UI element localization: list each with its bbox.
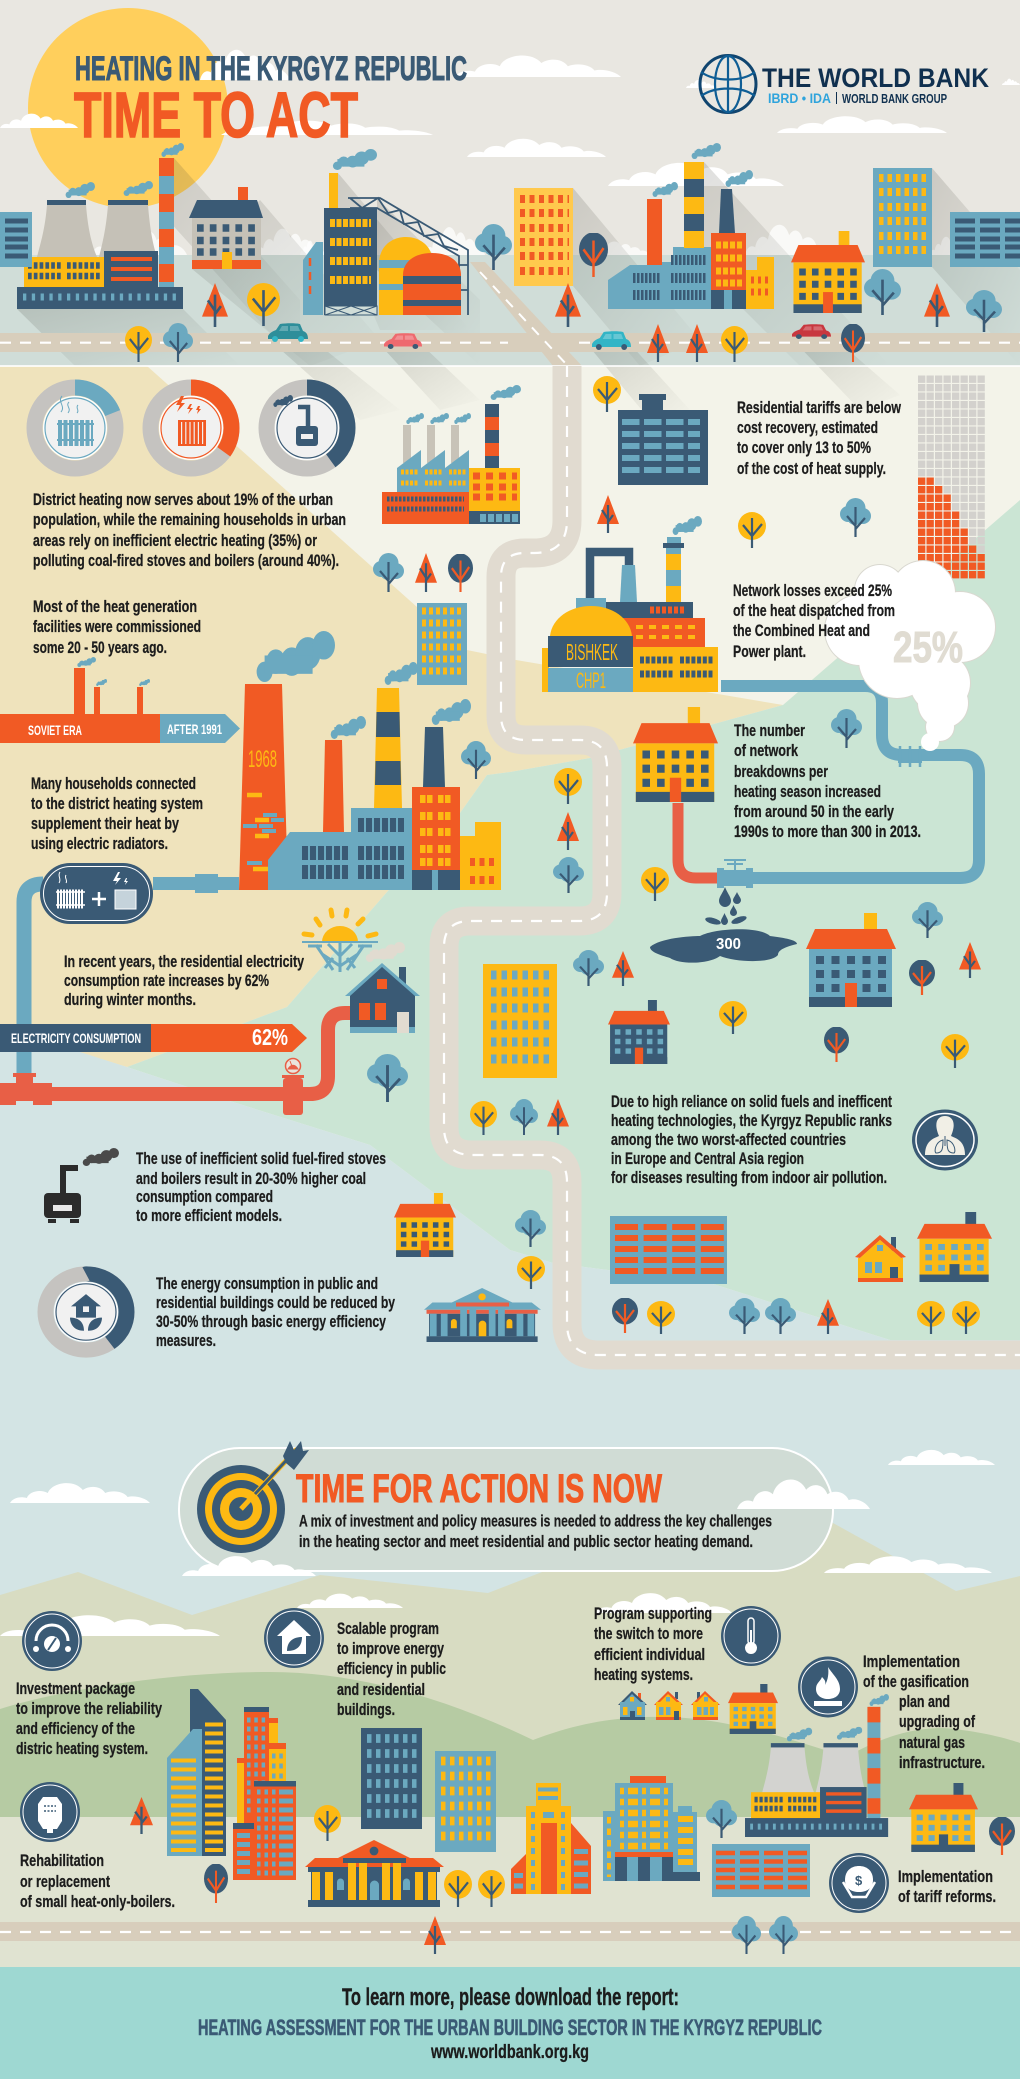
public building (temple) — [424, 1288, 541, 1342]
text: facility age: Most of the heat generation — [33, 598, 197, 616]
step: gasification: plan and — [899, 1693, 950, 1711]
icon: target with arrow — [197, 1441, 309, 1553]
text: residential tariffs: of the cost of heat supply. — [737, 460, 886, 478]
text: network breakdowns: from around 50 in the early — [734, 803, 895, 821]
step: rehabilitation of boilers — [20, 1782, 175, 1911]
step: tariff reforms: Implementation — [898, 1868, 993, 1886]
text: winter electricity: during winter months. — [64, 991, 196, 1009]
text: indoor air pollution: in Europe and Central Asia region — [611, 1150, 804, 1168]
text: district heating share — [33, 491, 346, 570]
text: network breakdowns: breakdowns per — [734, 763, 828, 781]
trees: mid right — [553, 709, 981, 995]
step: efficient individual heating: efficient individual — [594, 1646, 705, 1664]
valve and leak puddle 300: 300 — [716, 936, 741, 953]
step: scalable program: buildings. — [337, 1701, 395, 1719]
text: district heating share: areas rely on inefficient electric heating (35%) or — [33, 532, 317, 550]
banner: time for action is now: A mix of investment and policy measures is needed to address the key challenges — [299, 1512, 772, 1530]
step: rehabilitation of boilers: or replacement — [20, 1873, 110, 1891]
step: rehabilitation of boilers: Rehabilitation — [20, 1852, 104, 1870]
step: scalable program: to improve energy — [337, 1640, 445, 1658]
step: efficient individual heating — [594, 1605, 781, 1684]
text: network breakdowns: The number — [734, 722, 805, 740]
footer panel: To learn more, please download the report: — [342, 1984, 679, 2011]
blue house — [806, 913, 896, 1007]
text: district heating share: population, while the remaining households in urban — [33, 511, 346, 529]
factory with stripes chimney — [382, 385, 521, 524]
text: solid fuel stoves: consumption compared — [136, 1188, 273, 1206]
logo: The World Bank — [700, 56, 989, 112]
text: indoor air pollution — [611, 1093, 892, 1187]
yellow and orange tower — [511, 1783, 591, 1894]
navy house — [608, 1000, 670, 1064]
text: residential tariffs: Residential tariffs are below — [737, 399, 901, 417]
factory complex (right) — [608, 143, 774, 309]
footer panel — [0, 1967, 1020, 2079]
step: investment package: Investment package — [16, 1680, 135, 1698]
text: energy efficiency: 30-50% through basic energy efficiency — [156, 1313, 387, 1331]
text: electric radiators: supplement their heat by — [31, 815, 180, 833]
step: gasification: upgrading of — [899, 1713, 975, 1731]
text: network losses: of the heat dispatched from — [733, 602, 895, 620]
blue tall building — [873, 168, 932, 267]
text: indoor air pollution: for diseases resulting from indoor air pollution. — [611, 1169, 887, 1187]
text: energy efficiency — [156, 1275, 396, 1350]
text: energy efficiency: measures. — [156, 1332, 216, 1350]
text: winter electricity — [64, 953, 305, 1009]
step: investment package: and efficiency of the — [16, 1720, 135, 1738]
bar: electricity consumption 62%: 62% — [252, 1024, 288, 1050]
text: energy efficiency: The energy consumption in public and — [156, 1275, 378, 1293]
text: network breakdowns: 1990s to more than 300 in 2013. — [734, 823, 921, 841]
tall yellow building — [514, 188, 573, 286]
soviet era timeline bar — [0, 657, 240, 743]
factory complex with chimneys — [268, 662, 501, 890]
trees: right upper — [593, 376, 871, 548]
text: indoor air pollution: Due to high reliance on solid fuels and inefficent — [611, 1093, 892, 1111]
steam cloud with 25% — [824, 560, 996, 751]
power plant (bottom) — [745, 1694, 889, 1837]
yellow house above pipe — [633, 707, 718, 802]
banner: time for action is now: TIME FOR ACTION IS NOW — [296, 1467, 662, 1511]
text: network breakdowns: heating season increased — [734, 783, 881, 801]
steam cloud with 25%: 25% — [893, 623, 963, 672]
step: efficient individual heating: the switch to more — [594, 1625, 703, 1643]
text: winter electricity: consumption rate increases by 62% — [64, 972, 269, 990]
text: facility age: some 20 - 50 years ago. — [33, 639, 167, 657]
text: district heating share: polluting coal-fired stoves and boilers (around 40%). — [33, 552, 339, 570]
power plant (left) — [17, 143, 184, 309]
text: solid fuel stoves — [136, 1150, 386, 1225]
small yellow apartment (bottom) — [728, 1684, 778, 1734]
navy tall building — [361, 1728, 422, 1829]
trees: mid left — [373, 553, 473, 592]
step: gasification: natural gas — [899, 1734, 965, 1752]
pipe: hot water blue network — [678, 686, 979, 878]
tall yellow building with blue windows — [483, 964, 557, 1078]
footer panel: www.worldbank.org.kg — [430, 2042, 589, 2063]
Bishkek CHP1 plant: BISHKEK — [566, 639, 618, 665]
pill: radiator plus electric heater — [24, 863, 239, 1075]
step: scalable program — [264, 1608, 446, 1719]
sun — [28, 8, 228, 208]
text: residential tariffs: cost recovery, estimated — [737, 419, 878, 437]
logo: The World Bank: THE WORLD BANK — [762, 63, 989, 93]
step: investment package: distric heating system. — [16, 1740, 148, 1758]
text: electric radiators: using electric radiators. — [31, 835, 168, 853]
donut: energy efficiency 40% — [46, 1274, 126, 1350]
text: winter electricity: In recent years, the residential electricity — [64, 953, 305, 971]
logo: The World Bank: WORLD BANK GROUP — [842, 91, 947, 106]
text: network breakdowns — [734, 722, 921, 841]
cars — [268, 323, 831, 350]
logo: The World Bank: IBRD • IDA — [768, 91, 831, 106]
step: tariff reforms — [829, 1853, 996, 1913]
soviet era timeline bar: AFTER 1991 — [167, 721, 222, 737]
long diagonal shadows — [17, 158, 1020, 420]
blue building with orange bars (bottom) — [712, 1844, 810, 1897]
text: network breakdowns: of network — [734, 742, 799, 760]
soviet era timeline bar: SOVIET ERA — [28, 722, 82, 738]
text: solid fuel stoves: to more efficient models. — [136, 1207, 282, 1225]
Bishkek CHP1 plant: CHP1 — [576, 668, 606, 693]
step: investment package — [16, 1611, 163, 1758]
industrial plant with conveyor — [303, 149, 468, 315]
orange tower cluster — [233, 1707, 296, 1880]
donut: coal stoves 40% — [266, 388, 348, 468]
text: district heating share: District heating now serves about 19% of the urban — [33, 491, 333, 509]
text: network losses: Network losses exceed 25% — [733, 582, 892, 600]
navy house with smoke — [345, 942, 420, 1033]
skyscraper pair (left) — [167, 1689, 226, 1856]
text: residential tariffs: to cover only 13 to 50% — [737, 439, 871, 457]
step: scalable program: efficiency in public — [337, 1660, 446, 1678]
text: electric radiators: Many households connected — [31, 775, 196, 793]
step: gasification — [798, 1653, 985, 1772]
icon: coal stove — [44, 1148, 119, 1221]
navy office building — [618, 394, 708, 485]
text: solid fuel stoves: and boilers result in 20-30% higher coal — [136, 1170, 366, 1188]
waffle chart: cost recovery — [918, 379, 986, 575]
valve and leak puddle 300 — [650, 860, 797, 963]
text: residential tariffs — [737, 399, 901, 478]
tree: beside factory — [461, 741, 491, 779]
trees: center — [367, 950, 969, 1135]
step: gasification: Implementation — [863, 1653, 960, 1671]
clouds: lower sky — [0, 1450, 995, 1636]
blue tall building (bottom) — [435, 1751, 496, 1852]
trees: header — [125, 224, 1002, 362]
step: efficient individual heating: Program supporting — [594, 1605, 712, 1623]
Bishkek CHP1 plant — [542, 516, 718, 693]
step: gasification: of the gasification — [863, 1673, 969, 1691]
main road (header) — [0, 262, 1020, 366]
donut: electric heating 35% — [150, 388, 232, 468]
step: scalable program: and residential — [337, 1681, 425, 1699]
yellow apartment (right) — [917, 1212, 992, 1282]
icon: sun and snowflake — [302, 910, 378, 972]
big chimney 1968 with smoke: 1968 — [248, 746, 277, 773]
blue office block — [603, 1776, 700, 1881]
blue building with yellow windows — [417, 603, 467, 685]
text: solid fuel stoves: The use of inefficient solid fuel-fired stoves — [136, 1150, 386, 1168]
text: electric radiators: to the district heating system — [31, 795, 203, 813]
text: network losses — [733, 582, 895, 661]
clouds: header sky — [0, 50, 1020, 255]
white band under header — [0, 365, 1020, 367]
big chimney 1968 with smoke — [239, 631, 335, 890]
text: facility age: facilities were commissioned — [33, 618, 201, 636]
edge buildings — [0, 212, 1020, 267]
text: indoor air pollution: heating technologies, the Kyrgyz Republic ranks — [611, 1112, 892, 1130]
small houses row — [618, 1691, 720, 1720]
text: network losses: the Combined Heat and — [733, 622, 870, 640]
banner: time for action is now: in the heating sector and meet residential and public sector heating demand. — [299, 1533, 753, 1551]
bar: electricity consumption 62% — [0, 1024, 307, 1052]
step: investment package: to improve the reliability — [16, 1700, 163, 1718]
text: network losses: Power plant. — [733, 643, 806, 661]
blue building with orange bars — [610, 1216, 727, 1284]
step: gasification: infrastructure. — [899, 1754, 985, 1772]
donut: district heating 19% — [34, 388, 116, 468]
winding road — [444, 366, 1020, 1355]
pipe: red network to house — [0, 1013, 350, 1115]
grey apartment block — [189, 187, 263, 269]
yellow house (header) — [791, 231, 865, 313]
public building (bottom temple) — [305, 1840, 444, 1907]
small yellow cottage — [855, 1235, 906, 1282]
title: time to act: TIME TO ACT — [74, 79, 358, 151]
trees: bottom — [130, 1797, 1015, 1954]
title: heating in the Kyrgyz Republic: HEATING IN THE KYRGYZ REPUBLIC — [75, 50, 467, 88]
background: mountains and hills — [0, 1523, 1020, 1967]
text: facility age — [33, 598, 201, 657]
step: tariff reforms: $ — [855, 1873, 863, 1888]
text: energy efficiency: residential buildings could be reduced by — [156, 1294, 396, 1312]
icon: lungs — [912, 1110, 978, 1170]
step: rehabilitation of boilers: of small heat-only-boilers. — [20, 1893, 175, 1911]
small yellow apartment — [394, 1193, 456, 1257]
step: efficient individual heating: heating systems. — [594, 1666, 693, 1684]
house (bottom right) — [909, 1783, 978, 1852]
text: indoor air pollution: among the two worst-affected countries — [611, 1131, 846, 1149]
text: electric radiators — [31, 775, 203, 853]
trees: lower right — [515, 1210, 980, 1334]
step: scalable program: Scalable program — [337, 1620, 439, 1638]
banner: time for action is now — [179, 1448, 870, 1576]
bar: electricity consumption 62%: ELECTRICITY CONSUMPTION — [11, 1030, 141, 1046]
